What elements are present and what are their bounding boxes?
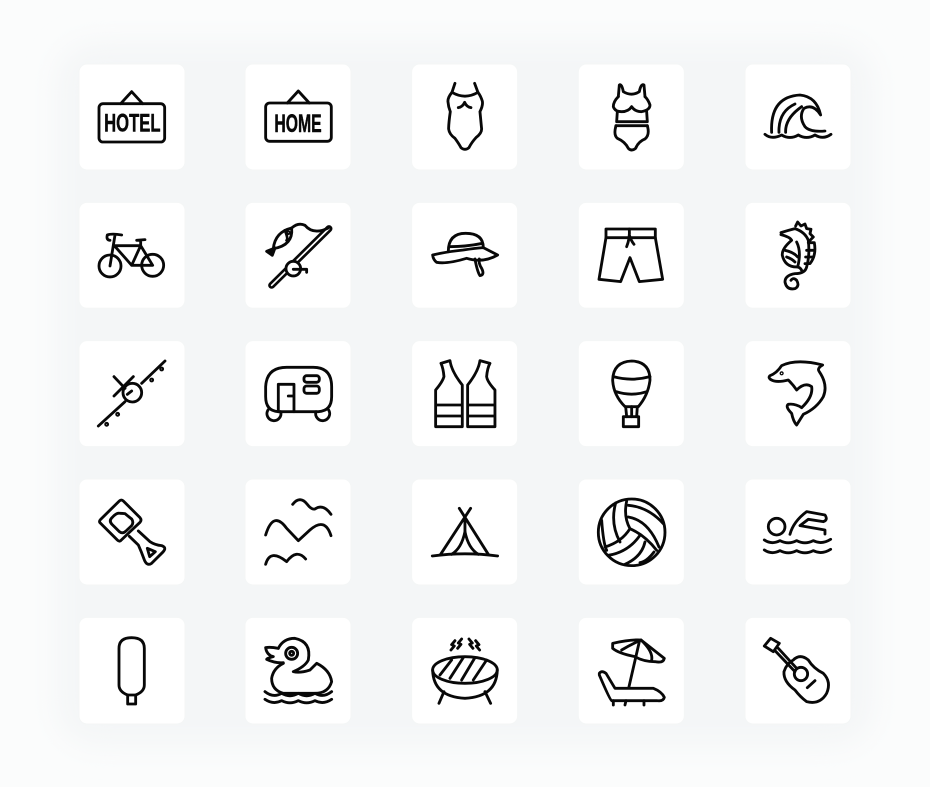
card	[245, 617, 351, 724]
card	[79, 617, 185, 724]
icon: rubber duck	[265, 638, 332, 703]
icon: home sign: HOME	[274, 110, 322, 138]
tile: bicycle	[79, 202, 185, 308]
card	[412, 202, 518, 308]
tile: bikini swimsuit	[578, 64, 684, 170]
card	[412, 64, 518, 170]
card	[245, 479, 351, 585]
tile: one-piece swimsuit	[412, 64, 518, 170]
icon: birds	[266, 500, 331, 564]
card	[578, 202, 684, 308]
tile: popsicle	[79, 617, 185, 724]
icon: swimsuit with band	[613, 85, 650, 150]
icon: swimmer	[764, 512, 831, 553]
icon: tent	[432, 508, 498, 556]
icon: seahorse	[781, 222, 815, 289]
tile: sand shovel	[79, 479, 185, 585]
tile: string lights	[79, 341, 185, 447]
card	[578, 341, 684, 447]
icon: dolphin	[769, 362, 825, 425]
icon: sun hat	[433, 233, 498, 276]
card	[412, 479, 518, 585]
card	[412, 617, 518, 724]
tile: seahorse	[745, 202, 851, 308]
card	[245, 202, 351, 308]
card	[79, 64, 185, 170]
tile: birds	[245, 479, 351, 585]
tile: beach lounger and umbrella	[578, 617, 684, 724]
tile: sun hat	[412, 202, 518, 308]
card	[79, 341, 185, 447]
tile: hot air balloon	[578, 341, 684, 447]
tile: swim shorts	[578, 202, 684, 308]
tile: rubber duck	[245, 617, 351, 724]
tile: home sign	[245, 64, 351, 170]
icon: hot air balloon	[613, 361, 650, 427]
tile: volleyball	[578, 479, 684, 585]
card	[578, 64, 684, 170]
tile: guitar	[745, 617, 851, 724]
icon: hotel sign: HOTEL	[104, 110, 160, 138]
icon: string with lamp	[98, 361, 165, 426]
card	[245, 341, 351, 447]
icon: life vest	[436, 361, 495, 427]
icon: caravan	[266, 367, 332, 421]
tile: caravan	[245, 341, 351, 447]
card	[79, 202, 185, 308]
icon: fishing rod and fish	[267, 224, 329, 285]
card	[412, 341, 518, 447]
icon: volleyball	[598, 499, 665, 566]
icon: swim shorts	[599, 229, 663, 282]
card	[79, 479, 185, 585]
card	[578, 617, 684, 724]
background glow	[56, 42, 874, 746]
icon: barbecue grill	[433, 639, 497, 703]
tile: dolphin	[745, 341, 851, 447]
icon: sand shovel	[99, 500, 165, 564]
card	[745, 617, 851, 724]
card	[578, 479, 684, 585]
icon: wave	[765, 95, 831, 137]
tile: life vest	[412, 341, 518, 447]
tile: swimmer	[745, 479, 851, 585]
card	[745, 64, 851, 170]
card	[245, 64, 351, 170]
icon: guitar	[764, 638, 829, 702]
tile: wave	[745, 64, 851, 170]
icon: beach lounger and umbrella	[599, 640, 664, 705]
card	[745, 202, 851, 308]
tile: barbecue grill	[412, 617, 518, 724]
tile: hotel sign	[79, 64, 185, 170]
icon: one-piece swimsuit	[448, 83, 483, 149]
card	[745, 341, 851, 447]
tile: tent	[412, 479, 518, 585]
tile: fishing rod	[245, 202, 351, 308]
icon: bicycle	[99, 234, 164, 277]
icon: popsicle	[119, 638, 144, 704]
card	[745, 479, 851, 585]
